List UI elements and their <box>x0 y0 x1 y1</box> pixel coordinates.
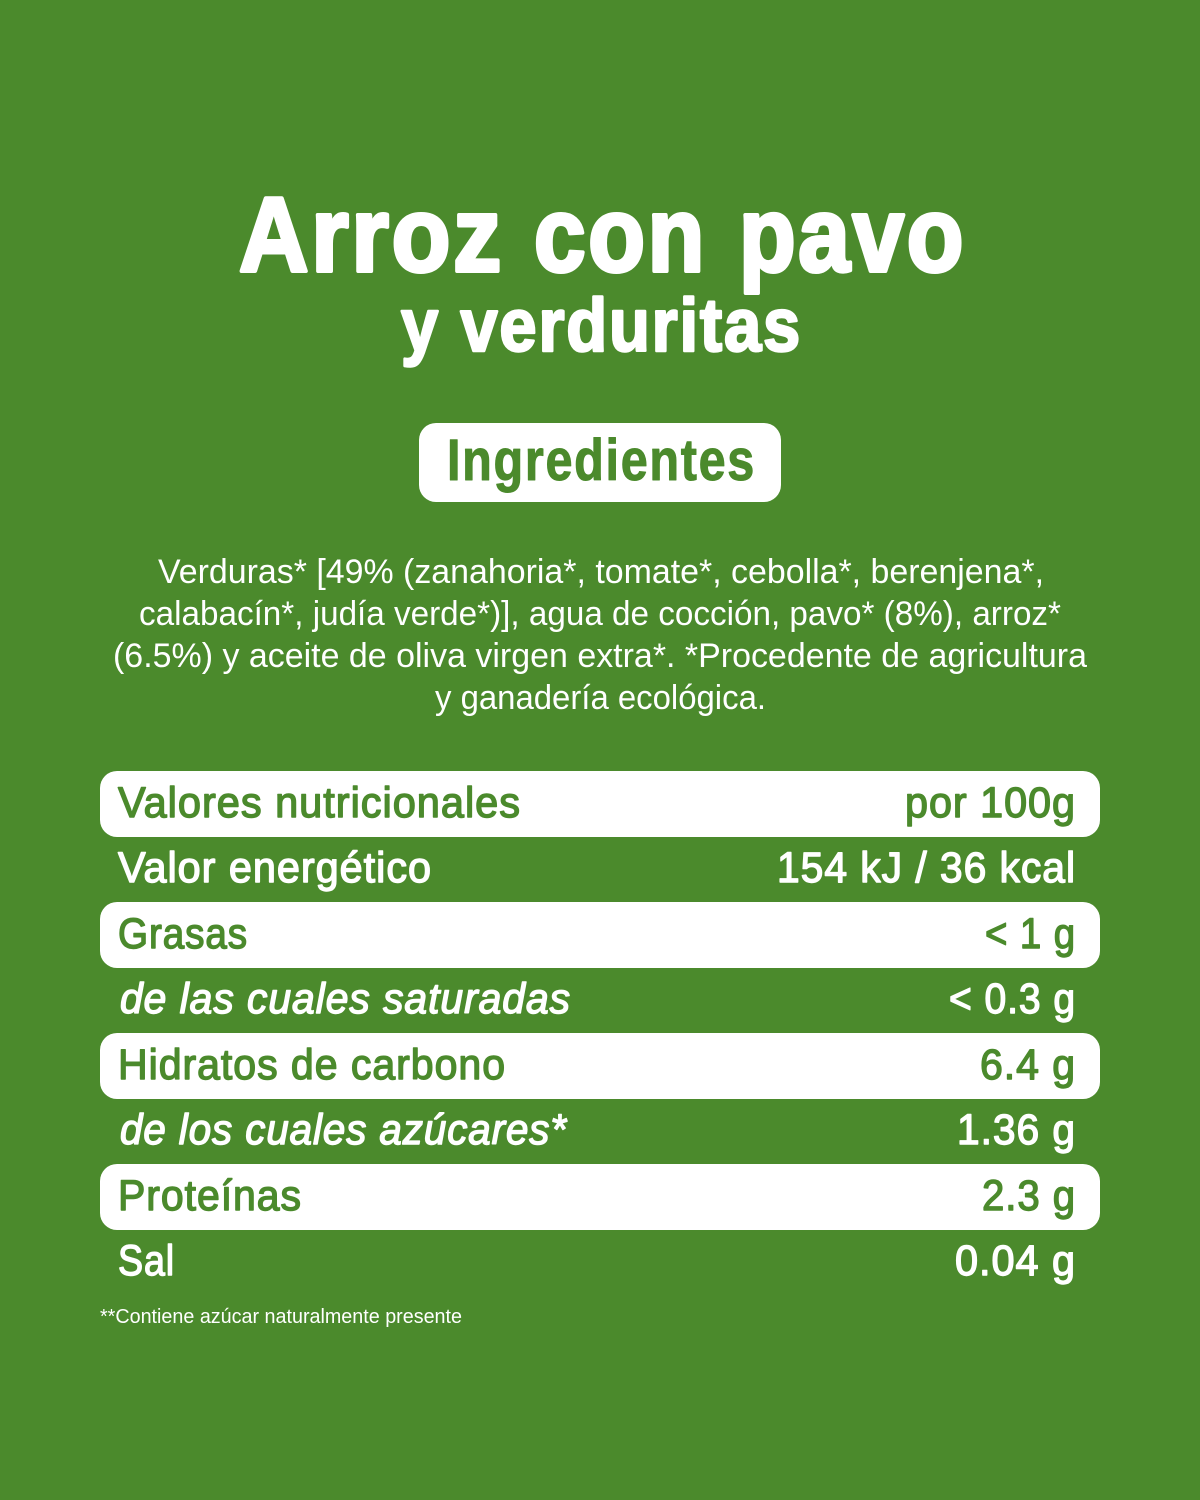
row: Valores nutricionales: Valores nutricionales <box>118 779 521 827</box>
row: Grasas: < 1 g <box>985 910 1076 958</box>
row: Hidratos de carbono: Hidratos de carbono <box>118 1041 506 1089</box>
row: Valor energético <box>118 844 1076 892</box>
ingredients text: y ganadería ecológica. <box>435 679 766 717</box>
nutrition table <box>100 771 1100 1285</box>
row: de los cuales azúcares: 1.36 g <box>957 1106 1076 1154</box>
row: de las cuales saturadas: de las cuales saturadas <box>120 975 571 1023</box>
title: Arroz <box>239 176 504 294</box>
row: Proteínas: Proteínas <box>118 1172 302 1220</box>
row: Proteínas <box>100 1164 1100 1230</box>
row: Sal: 0.04 g <box>955 1237 1076 1285</box>
footnote: **Contiene azúcar naturalmente presente <box>100 1306 462 1328</box>
row: Sal: Sal <box>118 1237 175 1285</box>
row: de las cuales saturadas <box>120 975 1076 1023</box>
title <box>239 176 966 367</box>
row: Valores nutricionales <box>100 771 1100 837</box>
row: Valor energético: Valor energético <box>118 844 432 892</box>
row: Proteínas: 2.3 g <box>982 1172 1076 1220</box>
ingredients text <box>113 553 1087 717</box>
row: Hidratos de carbono: 6.4 g <box>980 1041 1076 1089</box>
row: Sal <box>118 1237 1076 1285</box>
row: de los cuales azúcares <box>120 1106 1076 1154</box>
row: de las cuales saturadas: < 0.3 g <box>949 975 1076 1023</box>
ingredients text: Verduras* [49% (zanahoria*, tomate*, cebolla*, berenjena*, <box>158 553 1044 591</box>
title: con <box>534 176 707 294</box>
title: y verduritas <box>401 283 802 367</box>
row: de los cuales azúcares: de los cuales azúcares* <box>120 1106 567 1154</box>
row: Hidratos de carbono <box>100 1033 1100 1099</box>
row: Grasas <box>100 902 1100 968</box>
title: pavo <box>739 176 966 294</box>
ingredients text: (6.5%) y aceite de oliva virgen extra*. *Procedente de agricultura <box>113 637 1087 675</box>
row: Valor energético: 154 kJ / 36 kcal <box>777 844 1076 892</box>
row: Valores nutricionales: por 100g <box>905 779 1076 827</box>
ingredients text: calabacín*, judía verde*)], agua de cocción, pavo* (8%), arroz* <box>139 595 1061 633</box>
row: Grasas: Grasas <box>118 910 248 958</box>
heading: Ingredientes: Ingredientes <box>447 428 756 493</box>
